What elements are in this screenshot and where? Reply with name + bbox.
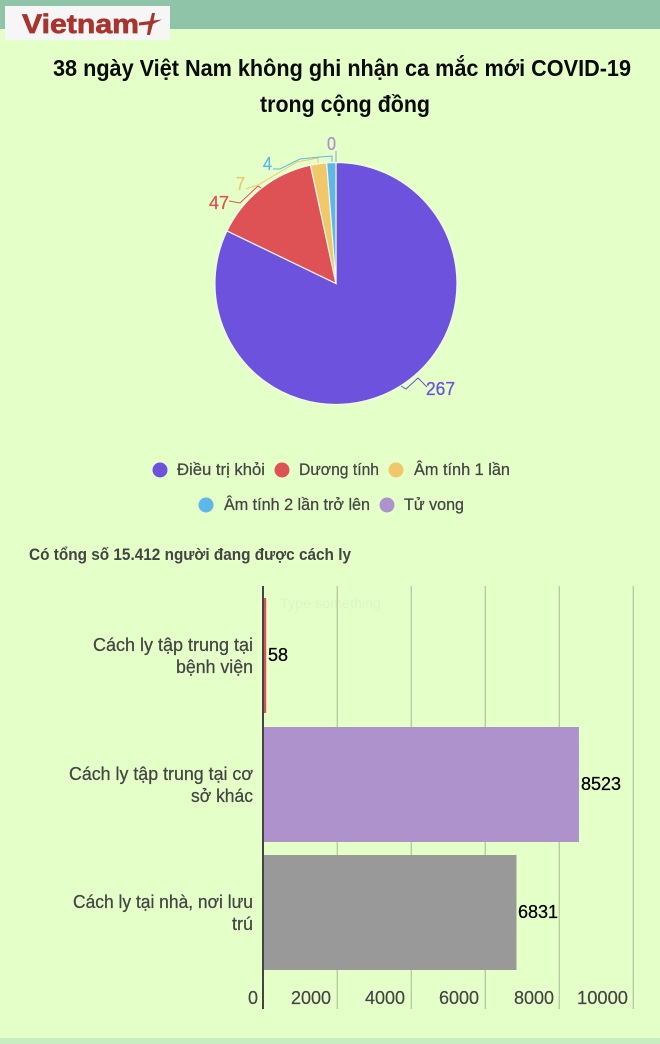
label: 47: [209, 186, 261, 213]
pie chart: [215, 162, 457, 404]
category labels: trú: [232, 914, 253, 934]
bar chart heading: Có tổng số 15.412 người đang được cách ly: [29, 545, 351, 564]
bar: tập trung tại cơ sở khác 8523: 8523: [581, 774, 621, 794]
bar: tập trung tại bệnh viện 58: [264, 598, 288, 713]
label: 0: 0: [327, 134, 336, 154]
slice: Âm tính 1 lần 7: [310, 163, 336, 284]
grid lines: [337, 586, 633, 1009]
title: 38 ngày Việt Nam không ghi nhận ca mắc mới COVID-19: [53, 54, 631, 81]
x axis labels: 6000: [439, 988, 479, 1008]
legend item: Âm tính 1 lần: Âm tính 1 lần: [414, 460, 510, 479]
bottom footer band: [0, 1038, 660, 1044]
x axis labels: 4000: [365, 988, 405, 1008]
label: 4: 4: [263, 154, 272, 174]
logo: Vietnam+: Vietnam: [22, 9, 139, 39]
legend item: Tử vong: [380, 495, 464, 514]
slice: Dương tính 47: [227, 165, 336, 284]
logo: Vietnam+: [5, 6, 170, 40]
label: 47: 47: [209, 193, 229, 213]
label: 4: [263, 154, 332, 174]
category labels: bệnh viện: [176, 657, 253, 677]
category labels: Cách ly tại nhà, nơi lưu: [73, 892, 253, 912]
x axis labels: 8000: [514, 988, 554, 1008]
x axis labels: [248, 988, 628, 1008]
category labels: [69, 635, 253, 934]
bar: tập trung tại bệnh viện 58: 58: [268, 645, 288, 665]
bar: tại nhà, nơi lưu trú 6831: [264, 855, 558, 970]
vertical axis: [262, 586, 264, 1009]
slice: Âm tính 2 lần trở lên 4: [327, 162, 336, 284]
x axis labels: 10000: [577, 988, 628, 1008]
placeholder text: Type something: [280, 595, 381, 611]
label: 7: 7: [236, 174, 245, 194]
slice: Điều trị khỏi 267: [215, 162, 457, 404]
title: trong cộng đồng: [260, 91, 430, 117]
legend item: Dương tính: Dương tính: [299, 460, 379, 479]
x axis labels: 0: [248, 988, 258, 1008]
category labels: Cách ly tập trung tại cơ: [69, 764, 253, 784]
category labels: sở khác: [191, 786, 253, 806]
label: 7: [236, 158, 318, 194]
label: 267: [401, 378, 455, 399]
category labels: Cách ly tập trung tại: [93, 635, 253, 655]
label: 267: 267: [426, 379, 455, 399]
legend item: Âm tính 2 lần trở lên: Âm tính 2 lần trở lên: [224, 495, 370, 514]
label: 0: [327, 134, 336, 162]
legend item: Tử vong: Tử vong: [404, 495, 464, 514]
bar chart: [69, 586, 633, 1009]
x axis labels: 2000: [291, 988, 331, 1008]
pie data labels: [209, 134, 455, 399]
legend: [152, 460, 510, 514]
bar: tập trung tại cơ sở khác 8523: [264, 727, 621, 842]
title: [53, 54, 631, 117]
legend item: Điều trị khỏi: Điều trị khỏi: [177, 460, 265, 479]
bar: tại nhà, nơi lưu trú 6831: 6831: [518, 902, 558, 922]
top header band: [0, 0, 660, 29]
